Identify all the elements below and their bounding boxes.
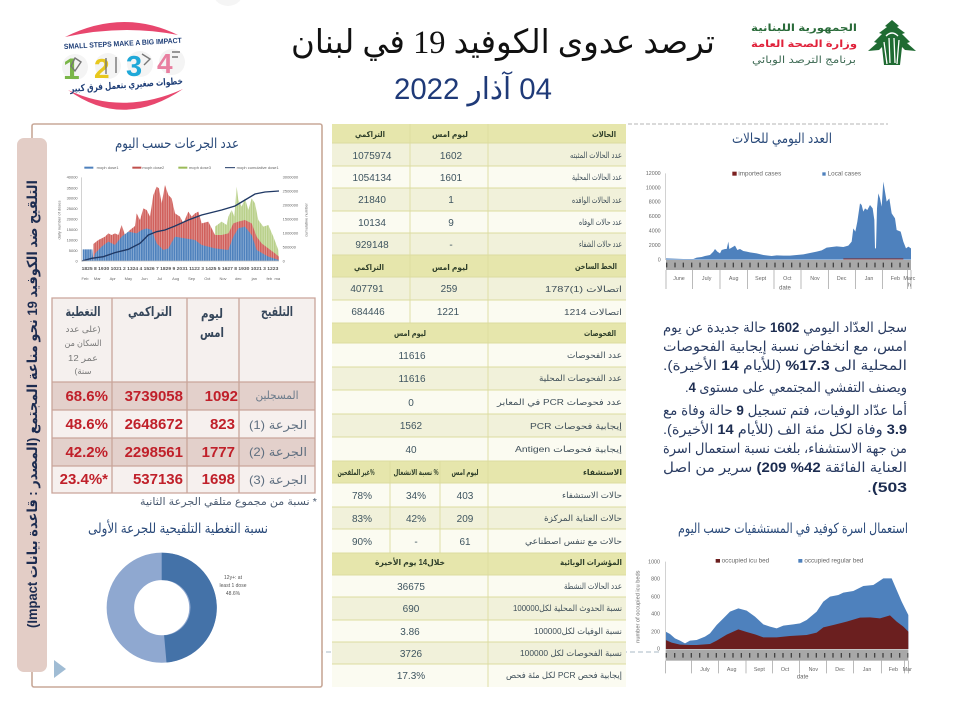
text block: summary: 503).	[867, 479, 907, 495]
vaccination table: الجرعة (3)	[249, 473, 307, 488]
side tab	[17, 138, 47, 672]
vaccination table: 3739058	[125, 388, 183, 405]
table section: hospitalization: ليوم امس	[452, 468, 478, 478]
table section: hotline: 259	[441, 284, 458, 295]
table section: tests: عدد الفحوصات المحلية	[539, 373, 622, 383]
table section: hotline	[350, 262, 622, 318]
vaccination table: 48.6%	[65, 416, 108, 433]
chart: daily doses: 1000000	[283, 231, 299, 236]
chart: daily doses: Feb	[82, 276, 89, 281]
chart: daily doses: jan	[251, 276, 257, 281]
chart: hospital bed occupancy: 200	[651, 629, 660, 635]
table section: hospitalization: % نسبة الانشغال	[394, 468, 438, 477]
table section: hotline: التراكمي	[354, 263, 384, 272]
chart: daily doses: 30000	[67, 196, 78, 201]
chart: daily cases: 12000	[646, 171, 661, 177]
table section: hospitalization: 42%	[406, 514, 426, 525]
chart: daily doses: Nov	[219, 276, 227, 281]
table section: cases: 21840	[358, 195, 386, 206]
chart: daily doses: May	[125, 276, 132, 281]
chart: hospital bed occupancy: 1000	[648, 559, 660, 565]
table section: cases: 1602	[440, 151, 463, 162]
vaccination table: سنة)	[74, 366, 92, 376]
chart: daily doses: Jun	[141, 276, 148, 281]
chart: hospital bed occupancy: Mar	[903, 667, 912, 673]
table section: cases: 9	[448, 218, 454, 229]
table section: epidemiological indicators: 17.3%	[397, 671, 425, 682]
chart: daily cases: Jan	[865, 276, 873, 282]
table section: hospitalization: حالات مع تنفس اصطناعي	[525, 536, 622, 546]
table section: hospitalization: 61	[459, 537, 471, 548]
table section: hospitalization: 209	[457, 514, 474, 525]
table section: hotline: اتصالات 1214	[564, 307, 622, 317]
text block: summary: من جهة الاستشفاء، بلغت نسبة استعمال اسرة	[663, 440, 907, 457]
chart: daily doses: moph dose3	[189, 165, 212, 170]
chart: hospital bed occupancy: 0	[657, 647, 660, 653]
vaccination table: الجرعة (1)	[249, 418, 307, 433]
chart: daily doses: 15000	[67, 227, 78, 232]
logo: small steps campaign: خطوات صغيري بتعمل فرق كبير	[69, 76, 183, 95]
table section: hotline: 1221	[437, 307, 460, 318]
table section: hospitalization: الاستشفاء	[583, 468, 622, 477]
table section: hotline: الخط الساخن	[575, 262, 617, 271]
chart: daily doses: Sep	[188, 276, 196, 281]
vaccination table: ليوم	[201, 306, 223, 322]
chart: daily cases: 2000	[649, 243, 661, 249]
vaccination table	[52, 298, 315, 493]
table section: epidemiological indicators: 690	[403, 604, 420, 615]
table section: hospitalization: 83%	[352, 514, 372, 525]
heading: daily cases: العدد اليومي للحالات	[732, 130, 832, 147]
chart: daily doses: 2500000	[283, 189, 299, 194]
chart: daily doses: 35000	[67, 185, 78, 190]
vaccination table: التغطية	[66, 304, 100, 319]
chart: hospital bed occupancy: Jan	[863, 667, 871, 673]
chart: daily doses	[57, 165, 309, 281]
chart: daily doses: 10000	[67, 237, 78, 242]
chart: daily doses: 500000	[283, 244, 297, 249]
table section: cases: -	[449, 240, 453, 251]
donut chart: 12y+: at	[224, 575, 243, 581]
table section: hospitalization: 90%	[352, 537, 372, 548]
logo: ministry of public health: الجمهورية اللبنانية	[751, 23, 857, 34]
chart: daily doses: 3000000	[283, 175, 299, 180]
table section: hospitalization	[338, 468, 622, 548]
table section: epidemiological indicators: عدد الحالات النشطة	[564, 581, 622, 591]
chart: hospital bed occupancy	[635, 558, 912, 680]
chart: daily doses: ma	[275, 276, 281, 281]
table section: hospitalization: 78%	[352, 491, 372, 502]
logo: small steps campaign: 3	[126, 51, 142, 83]
chart: daily doses: 2000000	[283, 203, 299, 208]
vaccination table: السكان من	[64, 338, 102, 348]
table section: epidemiological indicators: نسبة الوفيات لكل100000	[534, 626, 622, 636]
data table	[332, 124, 626, 687]
date: 04 آذار 2022	[394, 71, 552, 106]
table section: tests: عدد فحوصات PCR في المعابر	[496, 397, 622, 407]
table section: cases: عدد الحالات المحلية	[572, 172, 622, 182]
chart: daily doses: 1825 8 1930 1021 2 1324 4 1526 7 1829 9 2031 1122 3 1425 5 1627 8 1930 1021 3 1223	[82, 266, 279, 271]
vaccination table: 2298561	[125, 444, 183, 461]
logo: ministry of public health: برنامج الترصد الوبائي	[752, 55, 856, 66]
chart: daily doses: Mar	[94, 276, 101, 281]
table section: tests: ليوم امس	[394, 329, 426, 339]
chart: daily cases: 6000	[649, 214, 661, 220]
chart: daily doses: moph dose2	[142, 165, 165, 170]
chart: hospital bed occupancy: Aug	[727, 667, 736, 673]
chart: daily doses: 5000	[69, 248, 78, 253]
table section: hotline: ليوم امس	[432, 263, 468, 273]
table section: hospitalization: حالات العناية المركزة	[544, 513, 622, 523]
text block: summary: سجل العدّاد اليومي 1602 حالة جديدة عن يوم	[663, 319, 907, 336]
chart: daily cases: Aug	[729, 276, 738, 282]
vaccination table: التلقيح	[261, 304, 293, 319]
table section: hospitalization: 403	[457, 491, 474, 502]
vaccination table: عمر 12	[68, 353, 98, 363]
chart: daily cases: 10000	[646, 185, 661, 191]
chart: daily doses: 0	[283, 258, 286, 263]
chart: daily cases: Oct	[783, 276, 792, 282]
table section: epidemiological indicators: 3726	[400, 649, 423, 660]
table section: cases: عدد الحالات الوافده	[572, 195, 622, 205]
table section: hospitalization: حالات الاستشفاء	[562, 490, 622, 500]
table section: cases: التراكمي	[355, 130, 385, 139]
chart: hospital bed occupancy: July	[700, 667, 710, 673]
vaccination table: 823	[210, 416, 235, 433]
table section: epidemiological indicators: نسبة الحدوث المحلية لكل100000	[513, 603, 622, 613]
chart: daily doses: moph dose1	[97, 165, 119, 170]
table section: epidemiological indicators: 36675	[397, 582, 425, 593]
chart: hospital bed occupancy: Nov	[809, 667, 818, 673]
vaccination table: 68.6%	[65, 388, 108, 405]
table section: hotline: 684446	[351, 307, 385, 318]
chart: daily cases: date	[779, 285, 791, 291]
table section: epidemiological indicators: نسبة الفحوصات لكل 100000	[520, 648, 622, 658]
vaccination table: امس	[200, 325, 224, 340]
table section: cases: ليوم امس	[432, 130, 468, 140]
vaccination table: الجرعة (2)	[249, 445, 307, 460]
donut chart: least 1 dose	[220, 583, 247, 589]
table section: hotline: اتصالات ⁦1787(1)⁩	[545, 284, 622, 294]
vaccination table: 42.2%	[65, 444, 108, 461]
chart: daily doses: 25000	[67, 206, 78, 211]
text block: summary	[663, 319, 907, 495]
chart: daily cases: 4000	[649, 228, 661, 234]
table section: cases: عدد الحالات المثبته	[570, 150, 622, 160]
chart: daily doses: 0	[75, 258, 78, 263]
chart: daily cases: Nov	[810, 276, 820, 282]
chart: daily cases: h	[908, 283, 911, 289]
donut chart	[120, 553, 247, 662]
table section: hospitalization: %غير الملقحين	[338, 468, 374, 477]
chart: daily doses: Apr	[110, 276, 116, 281]
table section: tests: 11616	[398, 351, 426, 362]
chart: daily cases	[646, 171, 916, 291]
chart: daily doses: daily number of doses	[57, 201, 62, 239]
table section: hospitalization: -	[414, 537, 418, 548]
chart: daily cases: Local cases	[828, 171, 861, 178]
logo: ministry of public health	[751, 20, 916, 66]
table section: epidemiological indicators: 3.86	[400, 627, 420, 638]
vaccination table: المسجلين	[256, 390, 298, 402]
table section: tests: 0	[408, 398, 414, 409]
text block: summary: ويصنف التفشي المجتمعي على مستوى 4.	[685, 379, 907, 396]
text block: summary: 3.9 وفاة لكل مئة الف (للأيام 14 الأخيرة).	[663, 420, 907, 438]
chart: daily doses: dec	[235, 276, 242, 281]
chart: daily cases: June	[673, 276, 685, 282]
table section: tests	[394, 329, 622, 456]
table section: cases: الحالات	[592, 130, 616, 139]
logo: small steps campaign: 1	[63, 53, 80, 86]
heading: doses per day: عدد الجرعات حسب اليوم	[115, 135, 239, 152]
text block: summary: المحلية الى 17.3% (للأيام 14 الأخيرة).	[663, 356, 907, 374]
vaccination table: التراكمي	[128, 304, 172, 319]
text block: summary: أما عدّاد الوفيات، فتم تسجيل 9 حالة وفاة مع	[663, 401, 907, 419]
heading: first dose coverage: نسبة التغطية التلقيحية للجرعة الأولى	[88, 519, 268, 537]
chart: hospital bed occupancy: occupied regular bed	[804, 558, 864, 565]
arrow marker	[54, 660, 66, 678]
chart: daily doses: Aug	[172, 276, 179, 281]
chart: daily doses: feb	[267, 276, 273, 281]
chart: daily doses: moph cumulative dose1	[237, 165, 280, 170]
table section: epidemiological indicators: إيجابية فحص PCR لكل مئة فحص	[506, 670, 622, 681]
chart: daily cases: Sept	[755, 276, 767, 282]
donut chart: 48.6%	[226, 591, 241, 597]
table section: cases: عدد حالات الشفاء	[579, 239, 622, 249]
chart: hospital bed occupancy: 400	[651, 612, 660, 618]
vaccination table: 1698	[202, 471, 235, 488]
table section: epidemiological indicators	[375, 557, 622, 682]
vaccination table: 23.4%*	[60, 471, 108, 488]
chart: daily cases: Marc	[903, 276, 916, 282]
table section: tests: 11616	[398, 374, 426, 385]
table section: epidemiological indicators: المؤشرات الوبائية	[560, 558, 622, 567]
vaccination table: 1092	[205, 388, 238, 405]
table section: epidemiological indicators: خلال14 يوم الأخيرة	[375, 557, 445, 567]
table section: tests: 40	[405, 445, 417, 456]
vaccination table: (على عدد	[66, 324, 101, 334]
chart: hospital bed occupancy: Sept	[754, 667, 765, 673]
chart: hospital bed occupancy: 800	[651, 577, 660, 583]
table section: cases: 1054134	[353, 173, 392, 184]
table section: tests: الفحوصات	[584, 329, 616, 338]
table section: cases: عدد حالات الوفاه	[579, 217, 622, 227]
chart: hospital bed occupancy: occupied icu bed	[722, 558, 770, 565]
chart: daily doses: Jul	[157, 276, 162, 281]
table section: cases: 929148	[355, 240, 389, 251]
vaccination table: 537136	[133, 471, 183, 488]
logo: small steps campaign: 4	[157, 48, 173, 79]
chart: hospital bed occupancy: 600	[651, 594, 660, 600]
chart: daily cases: Dec	[837, 276, 847, 282]
chart: daily cases: 0	[658, 257, 661, 263]
chart: daily doses: Oct	[204, 276, 211, 281]
chart: daily doses: 1500000	[283, 217, 299, 222]
logo: ministry of public health: وزارة الصحة العامة	[751, 39, 857, 50]
chart: daily cases: July	[702, 276, 712, 282]
logo: small steps campaign: SMALL STEPS MAKE A BIG IMPACT	[64, 36, 182, 51]
table section: tests: إيجابية فحوصات Antigen	[515, 444, 622, 455]
table section: tests: 1562	[400, 421, 423, 432]
panel: vaccination	[17, 124, 322, 687]
vaccination table: 1777	[202, 444, 235, 461]
chart: hospital bed occupancy: Feb	[889, 667, 898, 673]
footnote: * نسبة من مجموع متلقي الجرعة الثانية	[140, 496, 317, 508]
chart: daily doses: 20000	[67, 217, 78, 222]
table section: tests: عدد الفحوصات	[567, 350, 622, 360]
chart: daily doses: cumulative number	[304, 203, 309, 237]
table section: hotline: 407791	[350, 284, 384, 295]
chart: daily cases: 8000	[649, 200, 661, 206]
table section: cases	[353, 130, 622, 251]
chart: daily cases: Feb	[891, 276, 900, 282]
chart: hospital bed occupancy: Dec	[835, 667, 845, 673]
chart: daily cases: imported cases	[738, 171, 781, 178]
table section: cases: 1	[448, 195, 454, 206]
side tab: التلقيح ضد الكوفيد 19 نحو مناعة المجتمع (المصدر : قاعدة بيانات Impact)	[24, 180, 41, 628]
table section: hospitalization: 34%	[406, 491, 426, 502]
logo: small steps campaign	[62, 22, 185, 110]
logo: small steps campaign: 2	[94, 53, 110, 84]
text block: summary: امس، مع انخفاض نسبة إيجابية الفحوصات	[663, 338, 907, 355]
chart: hospital bed occupancy: Oct	[781, 667, 790, 673]
table section: cases: 1601	[440, 173, 463, 184]
vaccination table: 2648672	[125, 416, 183, 433]
chart: hospital bed occupancy: number of occupied icu beds	[635, 570, 641, 643]
title: ترصد عدوى الكوفيد 19 في لبنان	[291, 25, 715, 61]
chart: daily doses: 40000	[67, 175, 78, 180]
table section: cases: 1075974	[353, 151, 392, 162]
text block: summary: العناية الفائقة 42% 209) سرير من اصل	[663, 459, 907, 476]
table section: tests: إيجابية فحوصات PCR	[530, 421, 622, 432]
chart: hospital bed occupancy: date	[797, 674, 809, 680]
table section: cases: 10134	[358, 218, 386, 229]
